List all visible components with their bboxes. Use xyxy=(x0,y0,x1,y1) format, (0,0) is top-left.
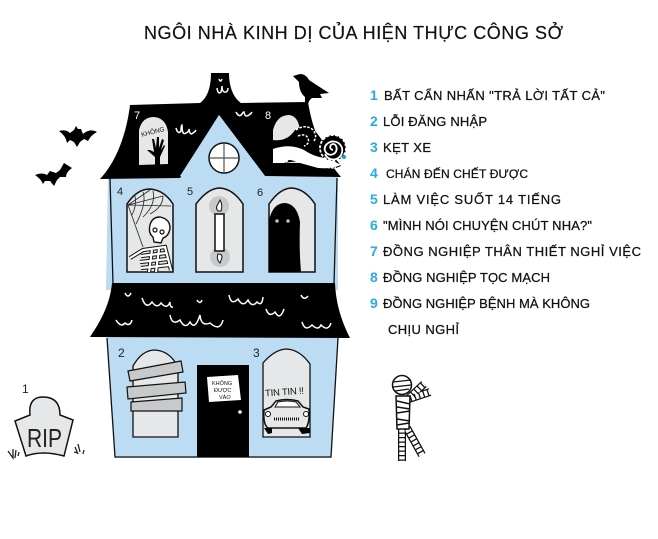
door sign: VÀO xyxy=(219,394,231,401)
door sign: KHÔNG xyxy=(212,380,232,387)
window 7: hand: KHÔNG xyxy=(140,124,165,139)
item 5: LÀM VIỆC SUỐT 14 TIẾNG xyxy=(383,192,561,207)
window 5: candle xyxy=(196,188,243,272)
gable xyxy=(180,115,265,176)
lower roof scallops xyxy=(116,293,331,328)
door sign xyxy=(207,375,241,402)
window 3: car: TIN TIN !! xyxy=(265,386,304,399)
round gable window xyxy=(209,143,239,173)
upper roof xyxy=(100,73,341,179)
item 5: 5 xyxy=(370,191,378,207)
item 9 xyxy=(370,295,590,337)
window 3: car xyxy=(263,349,310,437)
haunted house xyxy=(90,73,350,458)
grass xyxy=(8,444,84,458)
roof scallops xyxy=(176,79,252,134)
upper wall xyxy=(106,176,338,290)
item 4: 4 xyxy=(370,165,378,181)
tombstone: RIP xyxy=(27,423,62,453)
label 6: 6 xyxy=(257,187,263,199)
label 4: 4 xyxy=(117,186,123,198)
mummy limb outline xyxy=(402,384,430,461)
window 2: boarded xyxy=(127,350,186,437)
mummy limb stripes xyxy=(402,384,430,461)
item 3: KẸT XE xyxy=(383,140,431,155)
item 9: CHỊU NGHỈ xyxy=(388,322,459,337)
mummy xyxy=(392,376,430,461)
mummy head xyxy=(392,376,412,394)
window 8: tentacle xyxy=(273,115,346,168)
item 9: 9 xyxy=(370,295,378,311)
door xyxy=(197,365,249,457)
label 2: 2 xyxy=(118,346,125,360)
window 6: ghost xyxy=(269,188,315,272)
label 8: 8 xyxy=(265,110,271,122)
label 1: 1 xyxy=(22,382,29,396)
item 2: 2 xyxy=(370,113,378,129)
item 9: ĐỒNG NGHIỆP BỆNH MÀ KHÔNG xyxy=(383,296,590,311)
window 4: skeleton xyxy=(127,189,173,272)
mummy torso stripes xyxy=(397,401,410,425)
label 5: 5 xyxy=(187,186,193,198)
item 8: ĐỒNG NGHIỆP TỌC MẠCH xyxy=(383,270,550,285)
item 6: 6 xyxy=(370,217,378,233)
label 7: 7 xyxy=(134,110,140,122)
item 4: CHÁN ĐẾN CHẾT ĐƯỢC xyxy=(386,166,528,181)
tombstone xyxy=(8,382,84,458)
lower roof xyxy=(90,283,350,338)
item 3: 3 xyxy=(370,139,378,155)
lower wall xyxy=(107,336,338,458)
item 1: BẤT CẨN NHẤN "TRẢ LỜI TẤT CẢ" xyxy=(384,88,605,103)
item 7: ĐỒNG NGHIỆP THÂN THIẾT NGHỈ VIỆC xyxy=(383,244,641,259)
crow xyxy=(293,74,329,104)
bat lower xyxy=(35,163,72,186)
item 2: LỖI ĐĂNG NHẬP xyxy=(383,114,487,129)
door sign: ĐƯỢC xyxy=(214,388,231,394)
item 8: 8 xyxy=(370,269,378,285)
label 3: 3 xyxy=(253,346,260,360)
legend list xyxy=(370,87,641,337)
mummy limb fill xyxy=(402,384,430,461)
item 6: "MÌNH NÓI CHUYỆN CHÚT NHA?" xyxy=(383,218,592,233)
window 7: hand xyxy=(139,117,168,165)
item 7: 7 xyxy=(370,243,378,259)
bat upper xyxy=(59,126,97,147)
title: NGÔI NHÀ KINH DỊ CỦA HIỆN THỰC CÔNG SỞ xyxy=(144,22,564,43)
item 1: 1 xyxy=(370,87,378,103)
mummy torso xyxy=(396,396,410,429)
